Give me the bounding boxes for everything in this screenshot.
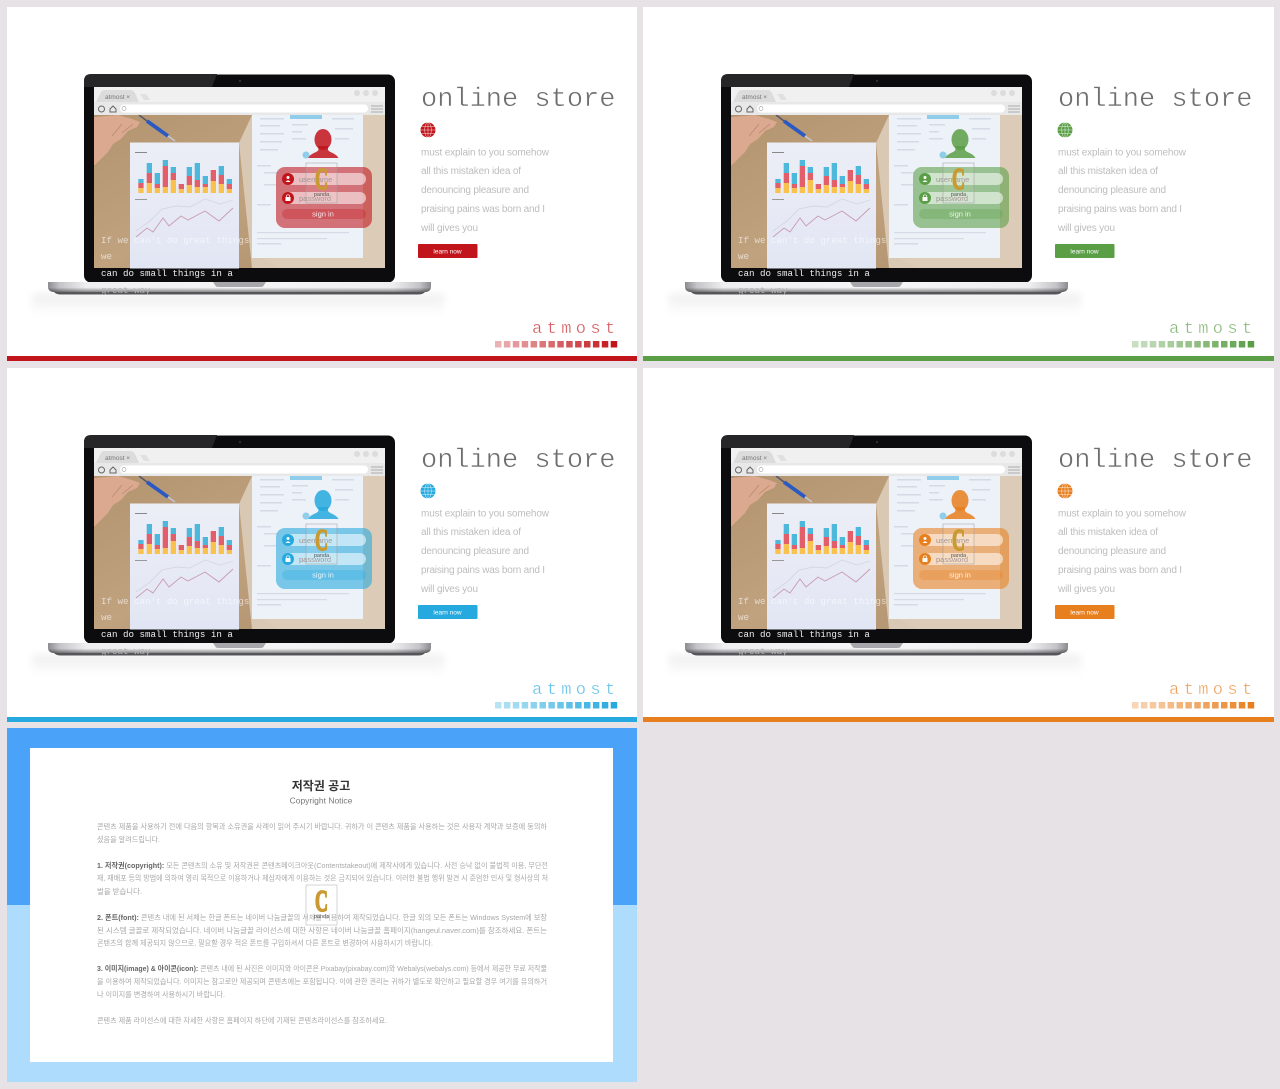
- title: online store: [421, 446, 615, 476]
- notice section 2: font: [97, 913, 547, 948]
- panel: copyright notice: [7, 728, 637, 1082]
- screen caption: can do small things in a: [738, 268, 870, 279]
- button: learn now: learn now: [433, 610, 462, 616]
- notice section 1: copyright: 벌을 받습니다.: [97, 887, 142, 896]
- button: learn now: [1055, 605, 1114, 619]
- button: learn now: [418, 605, 478, 619]
- login field labels: sign in: [949, 210, 971, 218]
- watermark badge: panda: [314, 192, 330, 198]
- brand name: atmost: [532, 681, 620, 700]
- title: online store: [421, 85, 615, 115]
- screen caption: we: [101, 251, 112, 262]
- notice subheading: Copyright Notice: [290, 796, 353, 806]
- screen caption: [738, 235, 886, 296]
- login field labels: password: [936, 555, 968, 564]
- login field labels: sign in: [312, 570, 334, 580]
- notice section 3: image and icon: 나 이미지를 변경하여 사용하시기 바랍니다.: [97, 990, 225, 999]
- screen caption: great way: [101, 285, 151, 296]
- screen caption: If we can't do great things: [101, 235, 249, 246]
- bottom bar: [643, 717, 1274, 722]
- laptop mockup: [32, 74, 444, 316]
- login field labels: username: [936, 175, 969, 184]
- body text: must explain to you somehow: [421, 148, 550, 158]
- watermark badge: C: [315, 885, 328, 918]
- login field labels: password: [936, 194, 968, 203]
- login field labels: username: [299, 175, 332, 184]
- laptop mockup: [669, 74, 1081, 316]
- brand name: atmost: [532, 320, 620, 339]
- body text: must explain to you somehow: [421, 508, 550, 520]
- body text: [1057, 148, 1187, 234]
- body text: [420, 508, 550, 595]
- bottom bar: [643, 356, 1274, 361]
- title: online store: [1058, 85, 1252, 115]
- body text: all this mistaken idea of: [421, 166, 521, 177]
- login field labels: password: [299, 555, 331, 564]
- body text: praising pains was born and I: [1058, 204, 1182, 215]
- button: learn now: [1055, 244, 1114, 258]
- browser tab label: atmost ×: [742, 94, 767, 101]
- backdrop upper blue: [7, 728, 637, 905]
- notice section 3: image and icon: 3. 이미지(image) & 아이콘(icon): 콘텐츠 내에 된 사진은 이미지와 아이콘은 Pixabay(pixabay.com)와 Webalys(webalys.com) 등에서 제공한 무료 저작물: [97, 964, 547, 973]
- panel: orange online store slide: [643, 368, 1274, 722]
- login field labels: sign in: [949, 570, 971, 580]
- screen caption: great way: [738, 646, 788, 657]
- brand name: atmost: [1169, 681, 1257, 700]
- body text: [1057, 508, 1187, 595]
- login field labels: username: [936, 536, 969, 545]
- login field labels: [299, 536, 334, 580]
- watermark badge: C: [952, 524, 965, 557]
- bottom bar: [7, 717, 637, 722]
- login field labels: [936, 175, 971, 218]
- button: learn now: learn now: [433, 248, 462, 256]
- browser tab label: atmost ×: [105, 94, 130, 101]
- body text: will gives you: [1057, 223, 1115, 234]
- login form: [276, 129, 372, 228]
- watermark badge: C: [315, 524, 328, 557]
- watermark badge: C: [952, 163, 965, 196]
- icon: globe: [1058, 484, 1072, 498]
- slide background: [643, 7, 1274, 356]
- watermark badge: [306, 524, 337, 564]
- watermark badge: [306, 163, 337, 203]
- body text: all this mistaken idea of: [1058, 166, 1158, 177]
- body text: will gives you: [1057, 584, 1115, 595]
- watermark badge: panda: [951, 192, 967, 198]
- panel: blue online store slide: [7, 368, 637, 722]
- slide background: [7, 7, 637, 356]
- body text: all this mistaken idea of: [421, 527, 521, 538]
- login field labels: username: [299, 536, 332, 545]
- body text: [420, 148, 550, 234]
- bottom bar: [7, 356, 637, 361]
- gradient squares: [495, 702, 617, 708]
- title: online store: [1058, 446, 1252, 476]
- body text: will gives you: [420, 223, 478, 234]
- screen caption: If we can't do great things: [101, 596, 249, 607]
- login form: [913, 129, 1009, 228]
- browser tab label: atmost ×: [742, 455, 767, 462]
- gradient squares: [495, 341, 617, 348]
- login field labels: [936, 536, 971, 580]
- panel: red online store slide: [7, 7, 637, 361]
- laptop mockup: [669, 435, 1081, 677]
- screen caption: we: [101, 612, 112, 623]
- slide background: [7, 368, 637, 717]
- brand name: atmost: [1169, 320, 1257, 339]
- button: learn now: learn now: [1070, 248, 1099, 256]
- notice section 3: image and icon: [97, 964, 547, 999]
- watermark badge: panda: [314, 553, 330, 559]
- notice closing line: 콘텐츠 제품 라이선스에 대한 자세한 사항은 홈페이지 하단에 기재된 콘텐츠라이선스를 참조하세요.: [97, 1016, 387, 1025]
- notice intro: [97, 822, 547, 844]
- screen caption: [738, 596, 886, 657]
- body text: denouncing pleasure and: [1058, 185, 1166, 196]
- body text: praising pains was born and I: [421, 204, 545, 215]
- slide background: [643, 368, 1274, 717]
- watermark badge: [943, 163, 974, 203]
- body text: must explain to you somehow: [1058, 148, 1187, 158]
- notice section 2: font: 콘텐츠의 함께 제공되지 않으므로, 필요할 경우 적은 폰트를 구입하셔서 다른 폰트로 변경하여 사용하시기 바랍니다.: [97, 938, 433, 948]
- body text: praising pains was born and I: [421, 565, 545, 576]
- icon: globe: [420, 122, 436, 138]
- laptop mockup: [32, 435, 444, 677]
- body text: denouncing pleasure and: [421, 185, 529, 196]
- body text: will gives you: [420, 584, 478, 595]
- login form: [276, 490, 372, 589]
- notice sheet: [30, 748, 613, 1062]
- button: learn now: learn now: [1070, 610, 1099, 616]
- screen caption: If we can't do great things: [738, 235, 886, 246]
- screen caption: we: [738, 612, 749, 623]
- notice section 1: copyright: 재, 재배포 등의 방법에 의하여 영리 목적으로 이용하거나 제삼자에게 이용하는 것은 금지되어 있습니다. 이러한 불법 행위 발견 시 준엄한 민사 및 형사상의 처: [97, 874, 548, 882]
- backdrop lower light blue: [7, 905, 637, 1082]
- watermark badge: C: [315, 163, 328, 196]
- screen caption: [101, 596, 249, 657]
- watermark badge: panda: [951, 553, 967, 559]
- gradient squares: [1132, 341, 1254, 348]
- icon: globe: [1058, 122, 1072, 138]
- screen caption: great way: [101, 646, 151, 657]
- watermark badge: [943, 524, 974, 564]
- notice intro: 콘텐츠 제품을 사용하기 전에 다음의 항목과 소유권을 사례이 읽어 주시기 바랍니다. 귀하가 이 콘텐츠 제품을 사용하는 것은 사용자 계약과 보증에 동의하: [97, 822, 547, 831]
- notice section 2: font: 된 시스템 글꼴로 제작되었습니다. 네이버 나눔글꼴 라이선스에 대한 사항은 네이버 나눔글꼴 홈페이지(hangeul.naver.com)를 참조하세요. 폰트는: [97, 926, 547, 935]
- notice intro: 셨음을 알려드립니다.: [97, 835, 160, 844]
- notice heading: 저작권 공고: [292, 778, 350, 793]
- screen caption: [101, 235, 249, 296]
- icon: globe: [420, 484, 436, 498]
- notice section 1: copyright: [97, 861, 548, 896]
- login field labels: password: [299, 194, 331, 203]
- screen caption: If we can't do great things: [738, 596, 886, 607]
- screen caption: can do small things in a: [738, 629, 870, 640]
- screen caption: great way: [738, 285, 788, 296]
- gradient squares: [1132, 702, 1254, 708]
- body text: all this mistaken idea of: [1058, 527, 1158, 538]
- panel: green online store slide: [643, 7, 1274, 361]
- screen caption: we: [738, 251, 749, 262]
- login field labels: [299, 175, 334, 218]
- login field labels: sign in: [312, 210, 334, 218]
- watermark badge: [306, 885, 337, 925]
- screen caption: can do small things in a: [101, 629, 233, 640]
- notice section 3: image and icon: 을 이용하여 제작되었습니다. 이미지는 참고로만 제공되며 콘텐츠에는 포함됩니다. 이에 관한 권리는 귀하가 별도로 확인하고 필요할 경우 여기를 유의하거: [97, 977, 547, 986]
- body text: denouncing pleasure and: [421, 546, 529, 557]
- notice section 2: font: 2. 폰트(font): 콘텐츠 내에 된 서체는 한글 폰트는 네이버 나눔글꼴의 서체를 이용하여 제작되었습니다. 한글 외의 모든 폰트는 Windows System에 보장: [97, 913, 547, 922]
- body text: denouncing pleasure and: [1058, 546, 1166, 557]
- browser tab label: atmost ×: [105, 455, 130, 462]
- body text: must explain to you somehow: [1058, 508, 1187, 520]
- screen caption: can do small things in a: [101, 268, 233, 279]
- login form: [913, 490, 1009, 589]
- notice section 1: copyright: 1. 저작권(copyright): 모든 콘텐츠의 소유 및 저작권은 콘텐츠메이크아웃(Contentstakeout)에 제작사에게 있습니다. 사전 승낙 없이 불법적 이용, 무단전: [97, 861, 548, 870]
- body text: praising pains was born and I: [1058, 565, 1182, 576]
- button: learn now: [418, 244, 478, 258]
- watermark badge: panda: [314, 914, 330, 920]
